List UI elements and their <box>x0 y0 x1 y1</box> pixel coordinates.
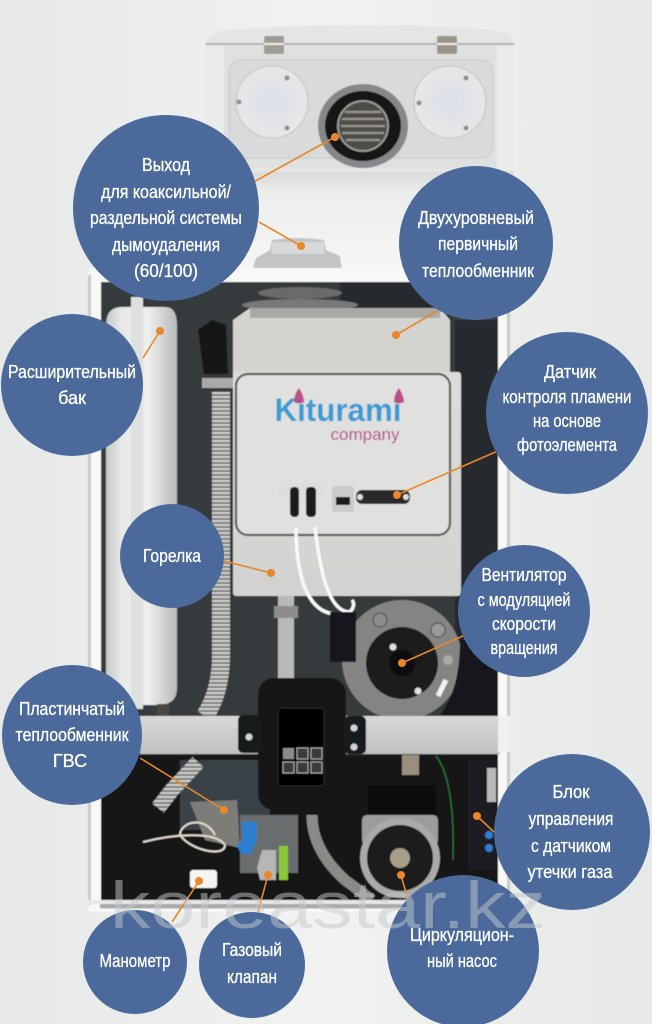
callout: fan <box>458 545 590 677</box>
callout: gas valve: клапан <box>227 967 277 987</box>
logo <box>274 388 404 444</box>
callout: expansion tank <box>1 314 143 456</box>
ignition electrodes <box>278 483 410 614</box>
callout: circulation pump <box>387 875 539 1024</box>
callout: control unit: с датчиком <box>531 836 611 856</box>
cover plate left <box>236 66 308 138</box>
boiler interior <box>101 282 498 900</box>
callout: control unit <box>494 754 650 910</box>
callout: fan: с модуляцией <box>478 590 570 610</box>
logo: company <box>330 425 400 444</box>
logo: Kiturami <box>274 392 402 428</box>
callout: plate heat exchanger: ГВС <box>53 751 87 771</box>
callout: expansion tank: Расширительный <box>8 362 136 382</box>
expansion tank <box>106 307 177 705</box>
callout: fan: скорости <box>492 614 556 634</box>
boiler photo <box>88 25 514 912</box>
heat exchanger top <box>233 308 450 378</box>
callout: flue outlet <box>73 115 259 301</box>
leader lines and dots <box>140 133 500 922</box>
black valve top left <box>198 320 228 374</box>
callout: gas valve: Газовый <box>222 940 282 960</box>
manometer <box>190 870 217 888</box>
callout: fan: вращения <box>490 638 558 658</box>
pump feed pipe <box>402 755 419 775</box>
burner plate <box>233 372 461 596</box>
callout: fan: Вентилятор <box>482 565 566 585</box>
callout: control unit: Блок <box>552 782 590 802</box>
callout: manometer: Манометр <box>100 951 170 971</box>
callout: manometer <box>83 910 187 1014</box>
callout: control unit: утечки газа <box>528 862 613 882</box>
callout: flue outlet: для коаксильной/ <box>101 182 231 202</box>
boiler frame <box>88 268 510 912</box>
cover plate right <box>414 66 486 138</box>
control unit <box>468 760 498 870</box>
callout: control unit: управления <box>528 809 614 829</box>
callout: burner: Горелка <box>143 546 202 566</box>
green wire <box>436 756 453 860</box>
mounting bar <box>140 716 500 754</box>
callout: plate heat exchanger: теплообменник <box>16 725 129 745</box>
callout: burner <box>120 504 224 608</box>
callout: primary heat exchanger <box>399 166 553 320</box>
callout: flue outlet: Выход <box>142 155 190 175</box>
callout: flame sensor: контроля пламени <box>502 387 632 407</box>
flue outlet <box>318 84 408 168</box>
callout: flue outlet: раздельной системы <box>90 208 242 228</box>
callout: primary heat exchanger: Двухуровневый <box>418 208 534 228</box>
gas valve <box>237 815 298 880</box>
callout: flame sensor: Датчик <box>544 362 596 382</box>
flexible pipe <box>205 392 221 716</box>
callout: plate heat exchanger: Пластинчатый <box>19 699 125 719</box>
callout: plate heat exchanger <box>2 665 142 805</box>
callout: circulation pump: ный насос <box>427 951 497 971</box>
control panel <box>238 678 366 810</box>
pressure gauge wires <box>143 822 225 852</box>
callout: flame sensor: фотоэлемента <box>517 435 618 455</box>
callout: flame sensor: на основе <box>533 411 601 431</box>
callout: primary heat exchanger: первичный <box>438 234 518 254</box>
callout: flame sensor <box>486 332 648 494</box>
callout: primary heat exchanger: теплообменник <box>422 261 534 281</box>
plate heat exchanger <box>190 800 240 848</box>
pump <box>360 785 440 898</box>
wall gap <box>206 172 514 270</box>
fan <box>330 600 498 720</box>
callout: flue outlet: (60/100) <box>134 261 198 281</box>
flue collar <box>253 238 342 268</box>
callout: circulation pump: Циркуляцион- <box>410 925 514 945</box>
callout: expansion tank: бак <box>58 388 86 408</box>
gas pipe <box>278 596 294 682</box>
hinges <box>264 36 284 54</box>
watermark: koreastar.kz <box>110 868 546 942</box>
corrugated hose <box>312 815 372 900</box>
callout: gas valve <box>199 912 305 1018</box>
top flue unit <box>206 25 514 172</box>
callout: flue outlet: дымоудаления <box>112 235 220 255</box>
